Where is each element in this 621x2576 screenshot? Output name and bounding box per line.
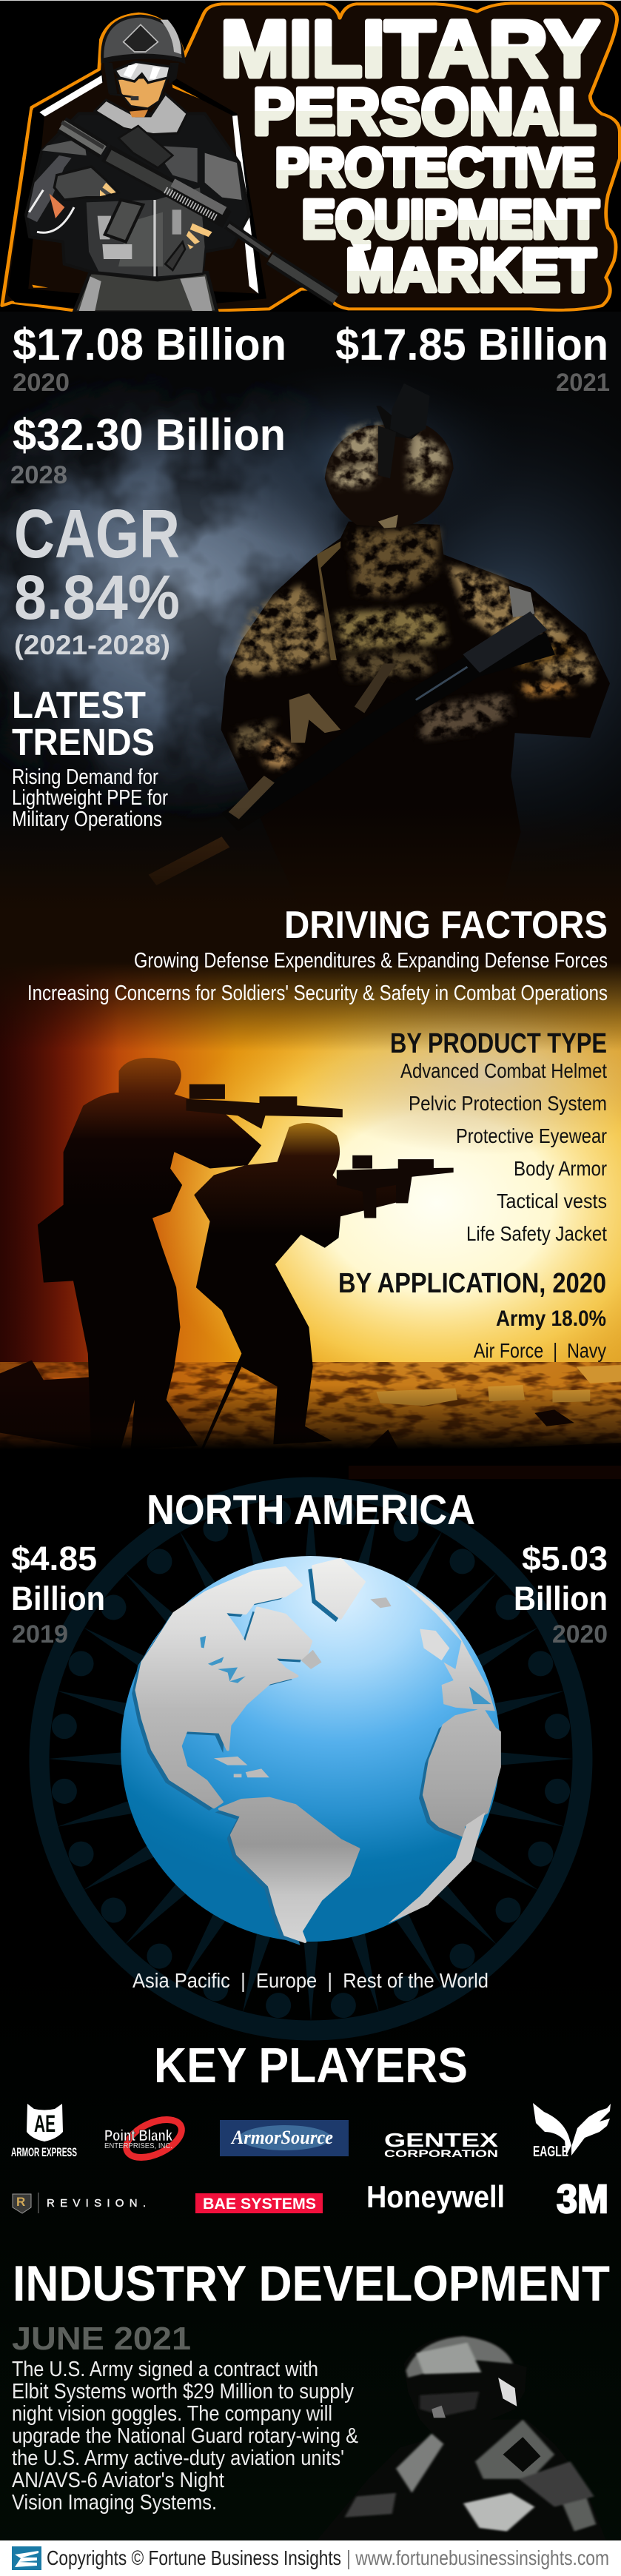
logo: Revision: [13, 2193, 146, 2213]
stat: 2028 value: [10, 410, 286, 489]
title line: PERSONAL: PERSONAL: [253, 75, 596, 148]
soldier legs: [74, 272, 217, 312]
logo: Armor Express: AE: [34, 2110, 56, 2137]
item: Tactical vests: [497, 1190, 607, 1212]
logo: Eagle: EAGLE: [533, 2144, 568, 2160]
CAGR period: (2021-2028): [14, 630, 170, 660]
Greenland: [313, 1559, 364, 1618]
text block: latest trends: [12, 684, 168, 831]
title: Military Personal Protective Equipment Market: [221, 4, 600, 304]
heading line: LATEST: [12, 684, 146, 726]
value: $4.85: [11, 1540, 97, 1577]
soldier hood: [95, 94, 187, 135]
logo: Point Blank: ENTERPRISES, INC.: [104, 2142, 172, 2150]
soldier torso: [26, 113, 249, 280]
stat: CAGR: [14, 495, 180, 660]
logo: Gentex Corporation: [384, 2129, 499, 2159]
text block: driving factors: [27, 904, 608, 1005]
rifle: [229, 644, 551, 822]
logo: Armor Express: [11, 2104, 77, 2159]
year text: 2020: [13, 369, 70, 397]
land shadows: [132, 1563, 495, 1945]
panel: header: [0, 0, 621, 312]
logo: ArmorSource: [220, 2120, 349, 2156]
soldier rifle: [61, 122, 335, 300]
logo: ArmorSource: ArmorSource: [230, 2127, 333, 2148]
unit: Billion: [11, 1580, 105, 1617]
value text: $17.85 Billion: [335, 320, 608, 369]
islands: [214, 1597, 392, 1777]
trend text: Rising Demand for: [12, 765, 158, 789]
ground: [0, 1362, 621, 1466]
soldier face: [117, 76, 168, 109]
panel: bottom background: [0, 1954, 621, 2576]
soldier one: [38, 1058, 261, 1449]
line: AN/AVS-6 Aviator's Night: [12, 2469, 224, 2492]
logo: Honeywell: Honeywell: [366, 2179, 505, 2214]
soldier two: [194, 1123, 408, 1458]
header backing with orange outline: [2, 3, 620, 311]
logo: Gentex Corporation: CORPORATION: [384, 2147, 498, 2159]
foreground rocks: [349, 1429, 621, 1479]
line: the U.S. Army active-duty aviation units': [12, 2446, 344, 2470]
logo: Revision: R: [16, 2195, 25, 2209]
soldier helmet: [102, 16, 184, 61]
stat: 2020 value: [13, 320, 286, 397]
year: 2020: [552, 1620, 608, 1648]
line: Vision Imaging Systems.: [12, 2491, 217, 2515]
trend text: Military Operations: [12, 808, 162, 831]
heading line: TRENDS: [12, 721, 155, 763]
panel: fire battle scene: [0, 962, 621, 1479]
photo: armed soldier: [152, 383, 610, 908]
logo: Eagle: [533, 2103, 611, 2160]
CAGR label: CAGR: [14, 495, 180, 572]
illustration: globe: [121, 1556, 500, 1945]
decoration: compass wheel: [39, 1487, 583, 2030]
heading: key players: KEY PLAYERS: [154, 2038, 468, 2093]
unit: Billion: [514, 1580, 608, 1617]
title line: MARKET: MARKET: [346, 237, 596, 304]
photo: soldier in greyscale: [317, 2335, 606, 2540]
Europe: [404, 1583, 495, 1711]
South America: [220, 1799, 358, 1942]
soldier goggles: [115, 61, 170, 83]
date: June 2021: JUNE 2021: [12, 2321, 191, 2357]
southern Africa crescent: [388, 1812, 485, 1923]
line: The U.S. Army signed a contract with: [12, 2358, 318, 2381]
rubble: [376, 1365, 621, 1406]
logo: Point Blank: Point Blank: [104, 2127, 172, 2144]
stat: 2019 value: [11, 1540, 105, 1648]
camouflage highlights: [234, 528, 594, 769]
item: Body Armor: [514, 1157, 607, 1180]
Africa: [424, 1709, 500, 1837]
North America: [137, 1568, 311, 1807]
CAGR value: 8.84%: [14, 563, 180, 632]
copyright text: Copyrights © Fortune Business Insights: [47, 2546, 341, 2569]
title line: EQUIPMENT: EQUIPMENT: [302, 190, 599, 249]
panel: smoke background with soldier: [0, 312, 621, 966]
silhouettes: two soldiers aiming: [0, 1058, 621, 1479]
stat: 2021 value: [335, 320, 610, 397]
logo: Revision: REVISION.: [47, 2197, 146, 2210]
year: 2019: [12, 1620, 68, 1648]
logo: 3M: 3M: [557, 2177, 608, 2221]
logo: Point Blank: [104, 2112, 187, 2165]
value text: $32.30 Billion: [13, 410, 286, 460]
soldier body silhouette: [221, 521, 610, 908]
year text: 2028: [10, 461, 67, 489]
text block: by application: [338, 1268, 606, 1362]
rifle two: [337, 1155, 454, 1218]
value text: $17.08 Billion: [13, 320, 286, 369]
value: $5.03: [522, 1540, 608, 1577]
rifle one: [186, 1084, 343, 1129]
panel: footer: [0, 2540, 621, 2576]
line: night vision goggles. The company will: [12, 2402, 332, 2426]
trend text: Lightweight PPE for: [12, 786, 168, 810]
other regions: Asia Pacific | Europe | Rest of the World: [132, 1969, 489, 1992]
line: Elbit Systems worth $29 Million to supply: [12, 2380, 354, 2404]
logo: Fortune Business Insights: [12, 2546, 41, 2570]
line: upgrade the National Guard rotary-wing &: [12, 2424, 358, 2448]
title line: MILITARY: MILITARY: [221, 4, 600, 93]
year text: 2021: [556, 369, 610, 397]
text block: by product type: [390, 1028, 607, 1245]
title line: PROTECTIVE: PROTECTIVE: [275, 138, 595, 198]
soldier helmet: [325, 423, 454, 528]
soldier hands: [54, 167, 118, 200]
stat: 2020 value: [514, 1540, 608, 1648]
heading: North America: NORTH AMERICA: [147, 1486, 475, 1534]
logo: Armor Express: ARMOR EXPRESS: [11, 2145, 77, 2159]
illustration: cartoon soldier: [7, 16, 335, 312]
lakes: [200, 1636, 246, 1683]
logo: Gentex Corporation: GENTEX: [384, 2129, 499, 2151]
logo: BAE Systems: BAE SYSTEMS: [203, 2196, 316, 2213]
text block: development description: [12, 2358, 358, 2515]
share: Army 18.0%: [496, 1307, 606, 1331]
